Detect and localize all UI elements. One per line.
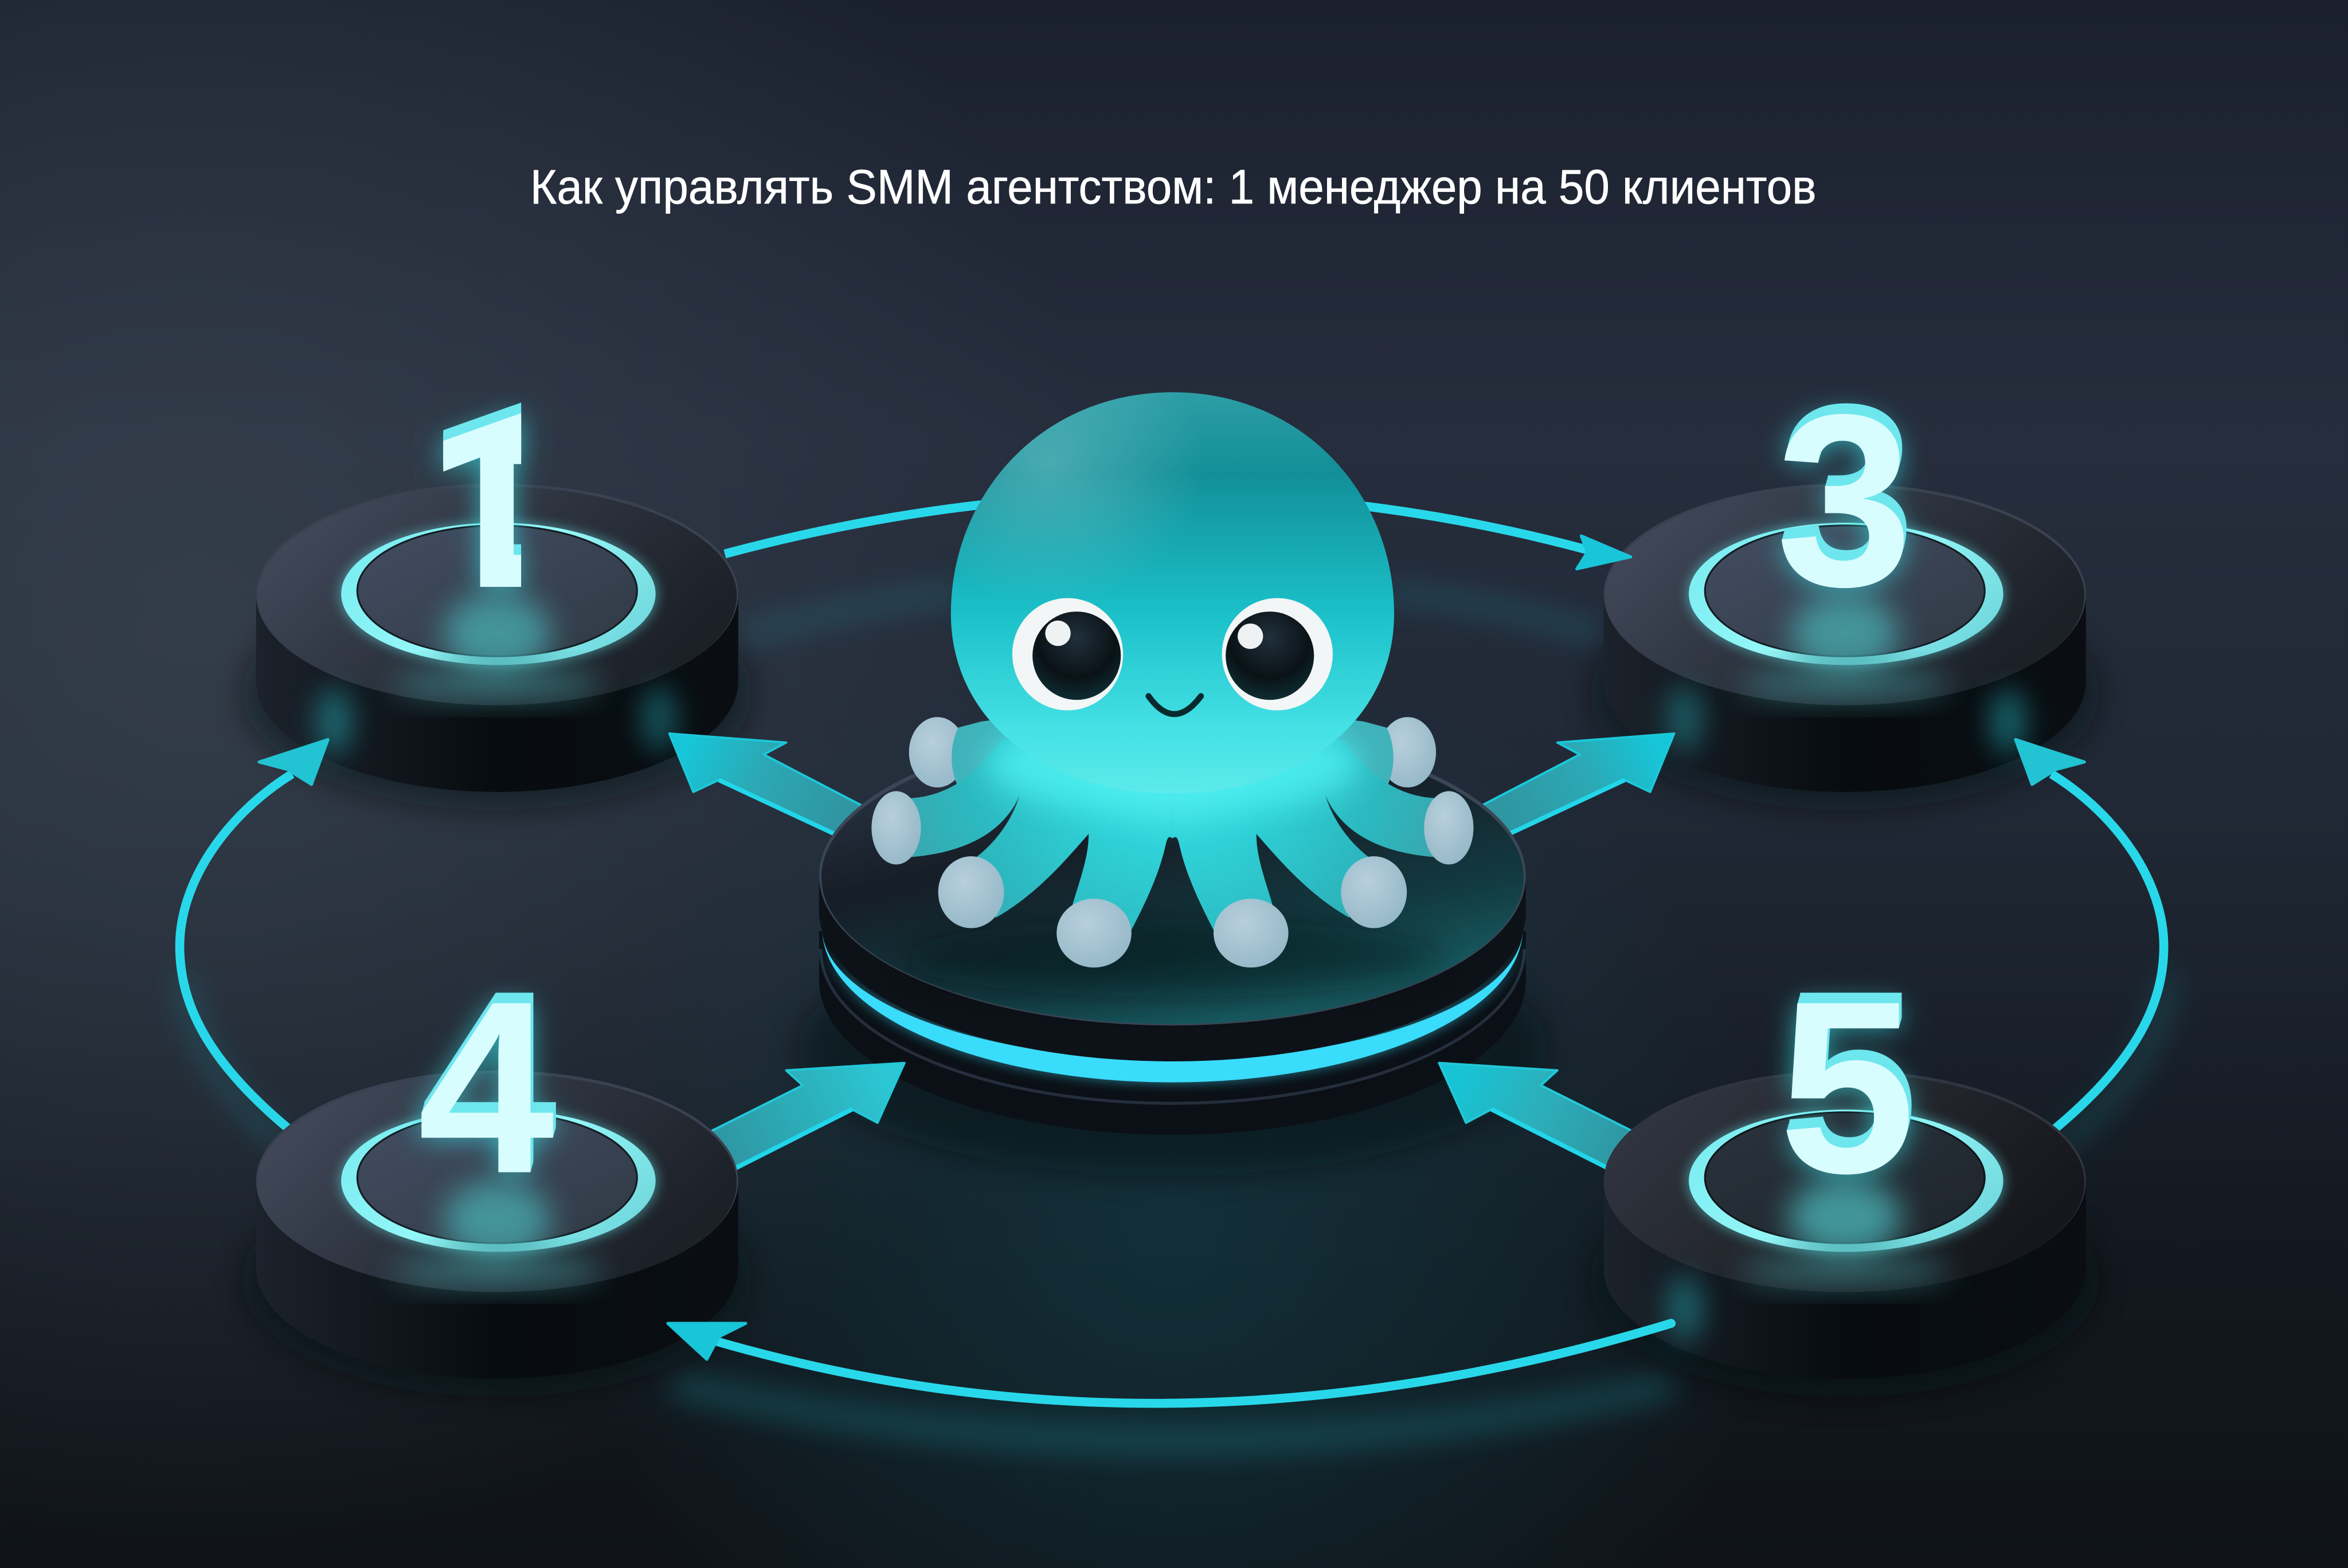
digit 4: 4 [418, 950, 556, 1224]
orbit arc: bottom, from step 5 to step 4 [668, 1323, 1671, 1404]
arrowhead: left arc [259, 739, 328, 785]
right eye [1222, 598, 1333, 710]
head glow [985, 712, 1360, 814]
platform base [819, 931, 1526, 1135]
platform top disc [819, 876, 1526, 1061]
floor glow reflections of the orbit [183, 593, 2168, 1441]
digit 5: 5 [1779, 950, 1916, 1224]
arrowhead: bottom arc [668, 1323, 746, 1359]
back tentacles [909, 716, 1436, 787]
head [951, 392, 1394, 793]
octopus mascot [871, 392, 1473, 997]
left eye [1012, 598, 1123, 710]
step 4 node [242, 950, 752, 1397]
arrow: centre to step 3 [1468, 734, 1674, 853]
central platform [798, 726, 1547, 1175]
step 5 node [1590, 950, 2099, 1397]
arrow: centre to step 1 [670, 734, 876, 853]
digit 3: 3 [1776, 363, 1912, 637]
smile [1149, 696, 1201, 714]
orbit arc: top, from step 1 to step 3 [725, 494, 1631, 569]
front tentacle tips [871, 791, 1473, 967]
cyan light ring [822, 928, 1523, 1083]
orbit arc: right, from step 5 to step 3 [2016, 739, 2164, 1138]
digit 1 [426, 401, 540, 602]
arrowhead: top arc [1577, 536, 1631, 569]
step 3 node [1590, 363, 2099, 810]
digit 1: 1 [413, 357, 555, 641]
arrowhead: right arc [2016, 739, 2084, 785]
title: Как управлять SMM агентством: 1 менеджер на 50 клиентов [530, 159, 1817, 214]
orbit arc: left, from step 4 to step 1 [180, 739, 328, 1138]
arrow: step 4 to centre [683, 1063, 905, 1183]
step 1 node [242, 357, 752, 810]
head highlight [951, 392, 1394, 793]
arrow: step 5 to centre [1439, 1063, 1661, 1183]
front tentacles [898, 719, 1446, 940]
